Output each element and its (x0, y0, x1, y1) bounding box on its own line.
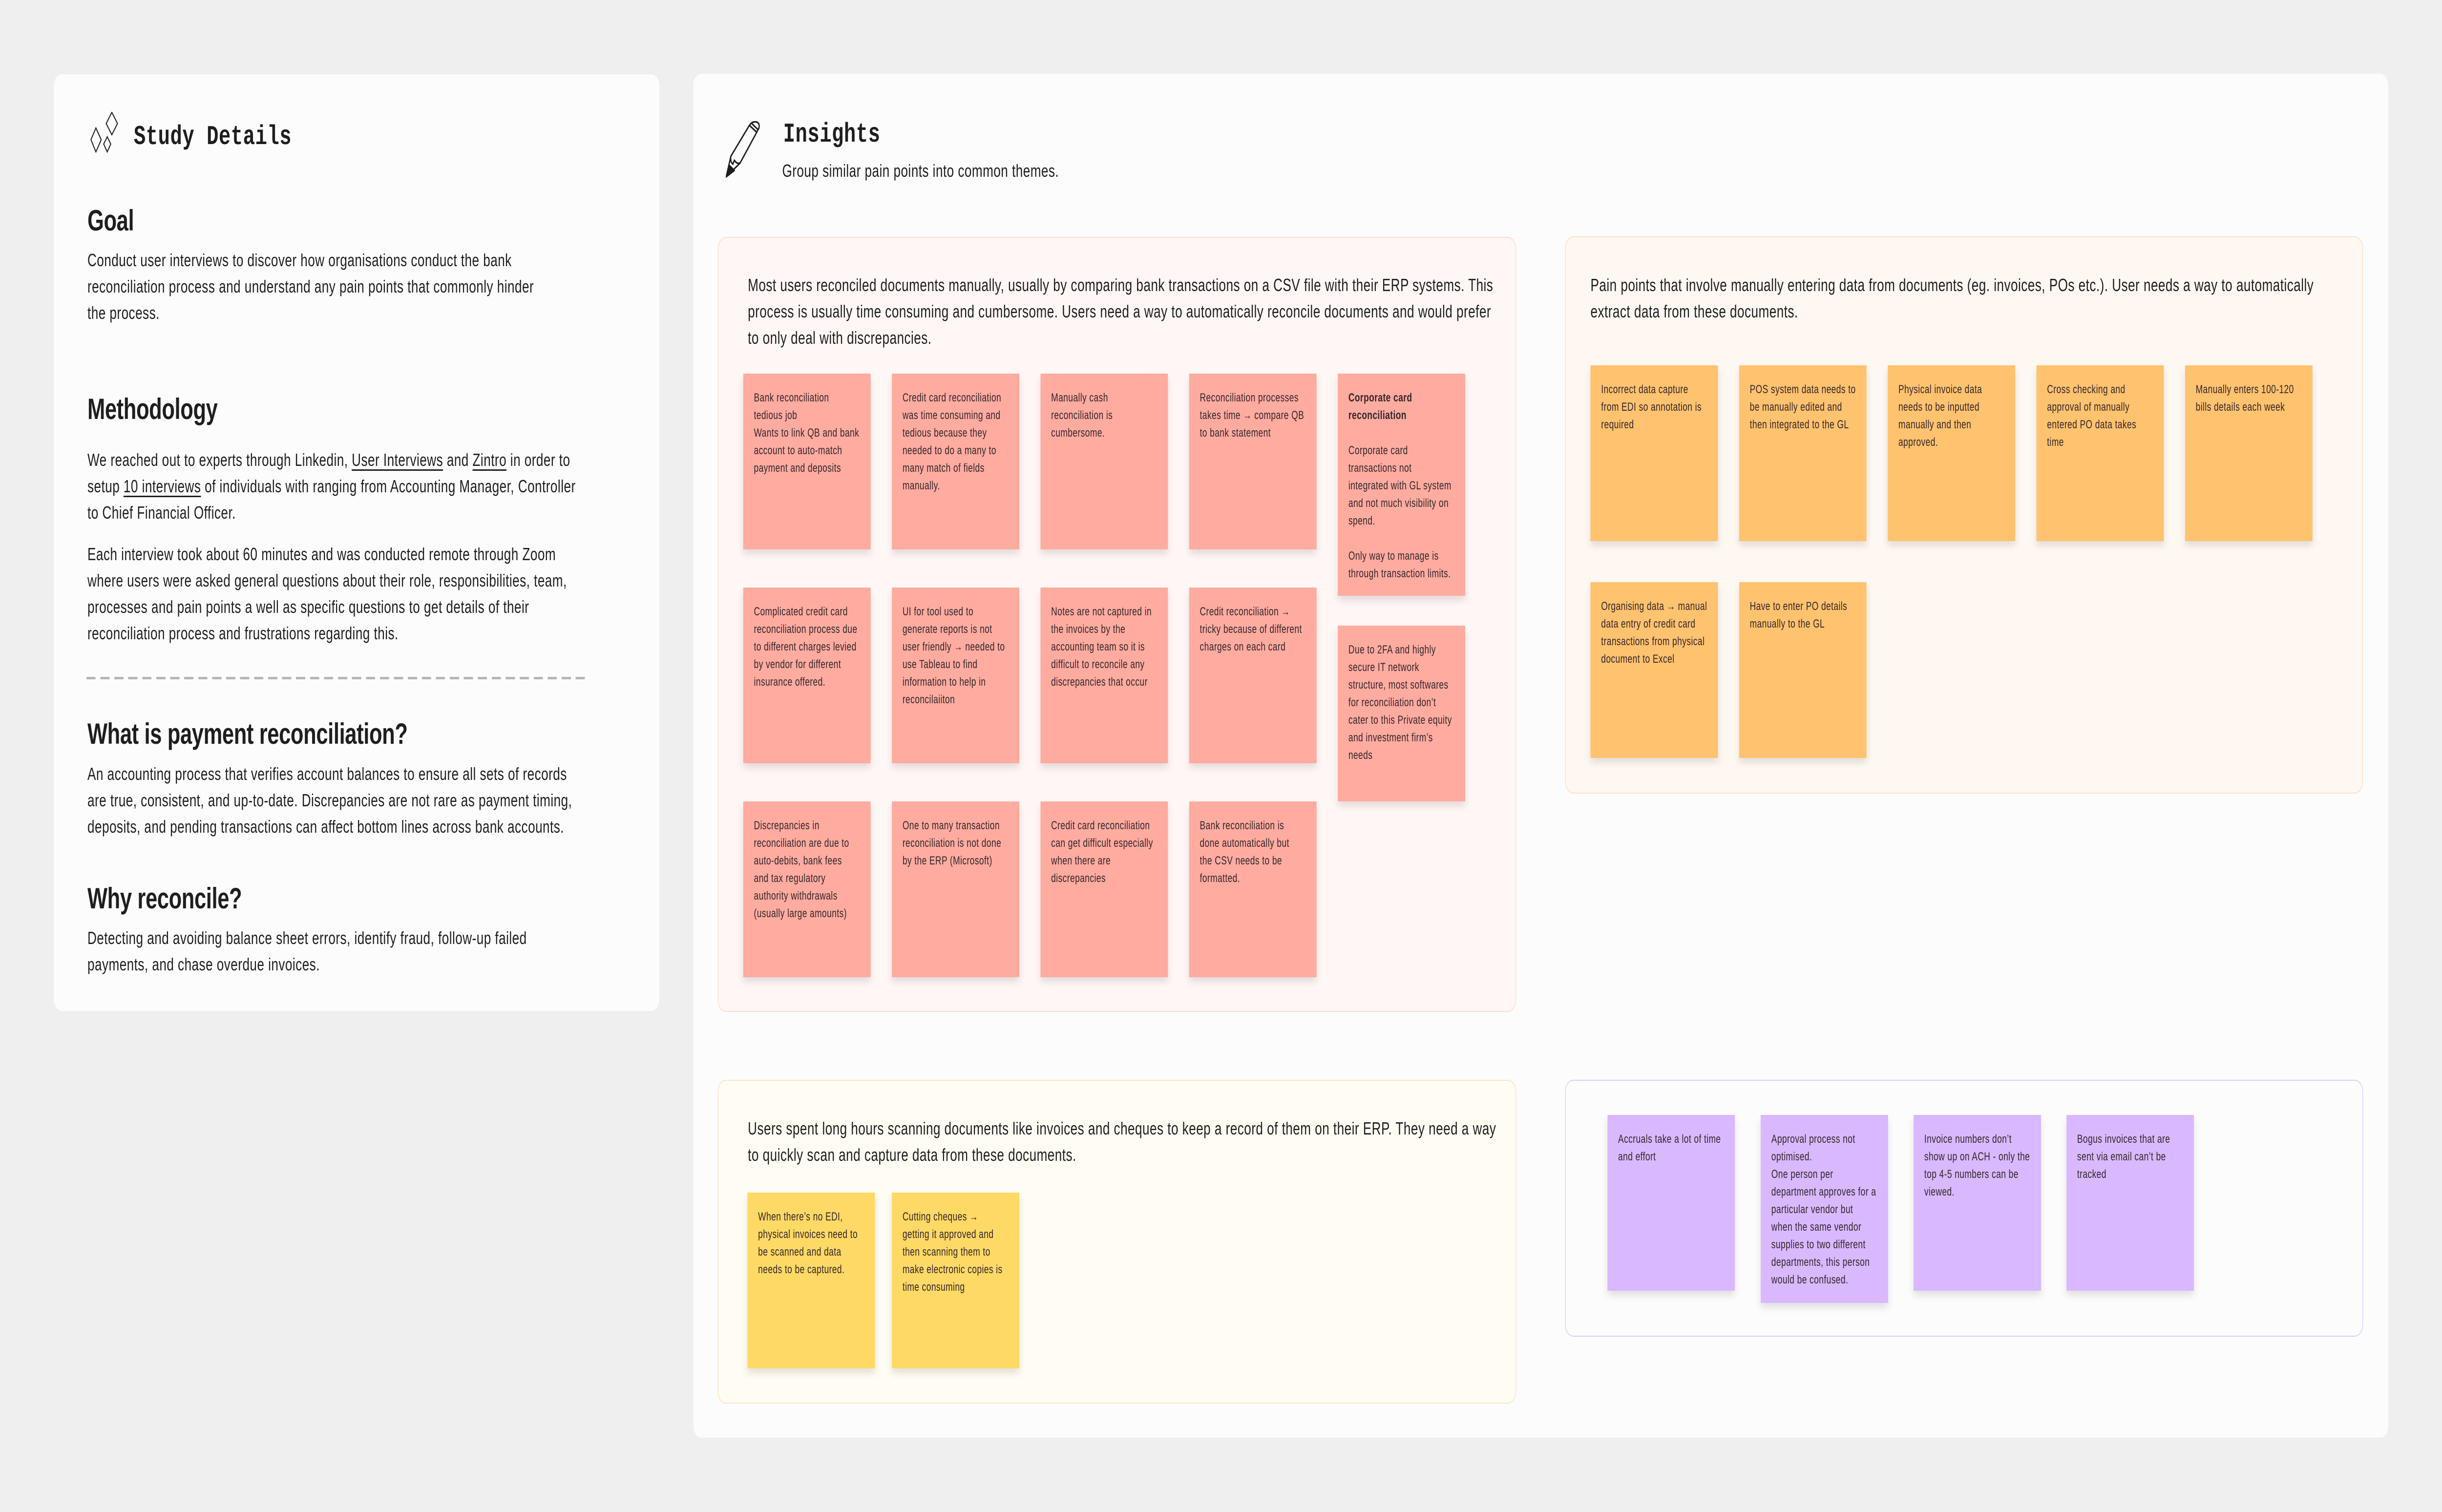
text: goal description: the process. (87, 303, 160, 323)
sticky note: discrepancies (1051, 872, 1106, 885)
panel: manual reconciliation theme (718, 237, 1516, 1012)
sticky note: information to help in (903, 675, 986, 689)
sticky note (2066, 1115, 2194, 1291)
sticky note: departments, this person (1771, 1256, 1870, 1269)
sticky note: required (1601, 418, 1634, 431)
text: manual data entry summary (1591, 274, 2314, 321)
text: manual reconciliation summary: to only deal with discrepancies. (748, 327, 932, 348)
sticky note: optimised. (1771, 1150, 1812, 1163)
text: manual data entry summary: extract data from these documents. (1591, 301, 1798, 321)
sticky note: Reconciliation processes (1200, 391, 1299, 404)
sticky note: reconciliation is (1051, 409, 1113, 422)
sticky note: corporate card: Only way to manage is (1348, 549, 1439, 563)
sticky note: Complicated credit card (754, 605, 848, 618)
text: payment reconciliation definition: are true, consistent, and up-to-date. Discrepancies are not rare as payment timing, (87, 790, 572, 810)
icon: pencil (726, 121, 760, 178)
sticky note: authority withdrawals (754, 889, 838, 903)
text: goal description: Conduct user interviews to discover how organisations conduct the bank (87, 250, 512, 270)
sticky note: corporate card: integrated with GL system (1348, 479, 1452, 492)
panel: other pain points (1565, 1080, 2363, 1337)
text: payment reconciliation definition: An accounting process that verifies account balances to ensure all sets of records (87, 764, 567, 783)
sticky note: department approves for a (1771, 1185, 1876, 1198)
sticky note: user friendly → needed to (903, 640, 1005, 653)
text: methodology recruiting: to Chief Financial Officer. (87, 502, 236, 523)
sticky note: charges on each card (1200, 640, 1285, 653)
heading: study details: Study Details (134, 121, 292, 152)
sticky note: Have to enter PO details (1750, 600, 1847, 613)
sticky note (743, 588, 871, 763)
text: methodology interviews: where users were asked general questions about their role, responsibilities, team, (87, 570, 567, 590)
sticky note: Credit card reconciliation (903, 391, 1001, 404)
sticky note: manually. (903, 479, 940, 492)
sticky note: UI for tool used to (903, 605, 973, 618)
sticky note: top 4-5 numbers can be (1924, 1168, 2019, 1181)
sticky note: When there’s no EDI, (758, 1210, 843, 1223)
panel: manual data entry theme (1565, 236, 2363, 794)
text: methodology interviews: processes and pain points a well as specific questions to get details of their (87, 597, 529, 616)
sticky note: make electronic copies is (903, 1263, 1003, 1276)
sticky note: cumbersome. (1051, 426, 1105, 440)
sticky note (1761, 1115, 1888, 1303)
sticky note: payment and deposits (754, 462, 841, 475)
sticky note: corporate card: Corporate card (1348, 391, 1412, 404)
sticky note: by the ERP (Microsoft) (903, 854, 992, 867)
sticky note (892, 588, 1019, 763)
text: document scanning summary: to quickly scan and capture data from these documents. (748, 1145, 1076, 1164)
sticky note: generate reports is not (903, 623, 992, 636)
sticky note (1040, 374, 1168, 549)
sticky note: corporate card: transactions not (1348, 462, 1411, 475)
sticky note (1739, 365, 1867, 541)
sticky note: account to auto-match (754, 444, 842, 457)
sticky note: corporate card: and not much visibility on (1348, 497, 1449, 510)
sticky note (1189, 374, 1317, 549)
sticky note: manually and then (1898, 418, 1971, 431)
sticky note: Approval process not (1771, 1133, 1855, 1146)
sticky note: Credit reconciliation → (1200, 605, 1290, 618)
heading: why reconcile: Why reconcile? (87, 882, 242, 915)
sticky note: tedious because they (903, 426, 987, 440)
sticky note: manually to the GL (1750, 617, 1825, 630)
sticky note: from EDI so annotation is (1601, 400, 1702, 414)
sticky note: Wants to link QB and bank (754, 426, 859, 440)
sticky note: accounting team so it is (1051, 640, 1145, 653)
sticky note: physical invoices need to (758, 1228, 858, 1241)
sticky note: the invoices by the (1051, 623, 1125, 636)
sticky note: One to many transaction (903, 819, 1000, 832)
sticky note: One person per (1771, 1168, 1833, 1181)
text: payment reconciliation definition: deposits, and pending transactions can affect bottom lines across bank accounts. (87, 817, 564, 836)
sticky note: be scanned and data (758, 1245, 842, 1259)
sticky note: (usually large amounts) (754, 907, 847, 920)
sticky note (1739, 582, 1867, 758)
sticky note: corporate card (1338, 374, 1465, 596)
sticky note: and tax regulatory (754, 872, 825, 885)
sticky note: viewed. (1924, 1185, 1955, 1198)
sticky note: approved. (1898, 436, 1938, 449)
sticky note: Incorrect data capture (1601, 383, 1688, 396)
sticky note: Discrepancies in (754, 819, 820, 832)
sticky note (1888, 365, 2015, 541)
sticky note: discrepancies that occur (1051, 675, 1148, 689)
sticky note: reconciliation are due to (754, 837, 849, 850)
sticky note: to bank statement (1200, 426, 1271, 440)
sticky note: the CSV needs to be (1200, 854, 1282, 867)
sticky note: Manually cash (1051, 391, 1108, 404)
text: manual reconciliation summary (748, 274, 1493, 348)
text: manual reconciliation summary: Most users reconciled documents manually, usually by comparing bank transactions on a CSV file with their ERP systems. This (748, 274, 1493, 295)
heading: methodology: Methodology (87, 393, 217, 425)
sticky note (743, 374, 871, 549)
sticky note: use Tableau to find (903, 658, 978, 671)
sticky note: formatted. (1200, 872, 1240, 885)
sticky note: then integrated to the GL (1750, 418, 1849, 431)
sticky note: for reconciliation don’t (1348, 696, 1436, 709)
sticky note: when there are (1051, 854, 1111, 867)
text: methodology interviews: reconciliation process and frustrations regarding this. (87, 623, 399, 643)
text: manual reconciliation summary: process is usually time consuming and cumbersome. Users need a way to automatically reconcile documents and would prefer (748, 301, 1491, 321)
sticky note: show up on ACH - only the (1924, 1150, 2030, 1163)
sticky note (1338, 626, 1465, 801)
sticky note: tedious job (754, 409, 797, 422)
sticky note: secure IT network (1348, 661, 1419, 674)
sticky note: Bank reconciliation (754, 391, 829, 404)
sticky note (2037, 365, 2164, 541)
sticky note: time consuming (903, 1281, 965, 1294)
sticky note (1189, 588, 1317, 763)
sticky note: Credit card reconciliation (1051, 819, 1150, 832)
sticky note: reconcilaiiton (903, 693, 955, 706)
sticky note: was time consuming and (903, 409, 1000, 422)
text: why reconcile description: payments, and chase overdue invoices. (87, 954, 320, 974)
sticky note: be manually edited and (1750, 400, 1842, 414)
sticky note: cater to this Private equity (1348, 714, 1452, 727)
sticky note: POS system data needs to (1750, 383, 1856, 396)
sticky note: can get difficult especially (1051, 837, 1153, 850)
sticky note: then scanning them to (903, 1245, 990, 1259)
sticky note: corporate card: reconciliation (1348, 409, 1407, 422)
sticky note: data entry of credit card (1601, 617, 1695, 630)
sticky note (1040, 588, 1168, 763)
sticky note (1591, 365, 1718, 541)
sticky note: to different charges levied (754, 640, 857, 653)
sticky note (892, 374, 1019, 549)
sticky note: Due to 2FA and highly (1348, 643, 1436, 656)
sticky note (1914, 1115, 2041, 1291)
sticky note: Accruals take a lot of time (1618, 1133, 1721, 1146)
text: document scanning summary (748, 1118, 1496, 1164)
sticky note (747, 1193, 875, 1368)
sticky note: insurance offered. (754, 675, 825, 689)
sticky note: approval of manually (2047, 400, 2129, 414)
sticky note: takes time → compare QB (1200, 409, 1304, 422)
sticky note: auto-debits, bank fees (754, 854, 842, 867)
text: methodology recruiting: We reached out to experts through Linkedin, User Interviews and Zintro in order to (87, 449, 570, 470)
text: payment reconciliation definition (87, 764, 572, 836)
sticky note (2185, 365, 2313, 541)
text: why reconcile description (87, 928, 527, 974)
text: methodology recruiting (87, 449, 576, 523)
sticky note (892, 801, 1019, 977)
sticky note (1591, 582, 1718, 758)
text: insights subtitle: Group similar pain points into common themes. (782, 160, 1059, 181)
sticky note (743, 801, 871, 977)
panel: insights (693, 73, 2389, 1438)
sticky note: done automatically but (1200, 837, 1289, 850)
heading: what is payment reconciliation: What is payment reconciliation? (87, 717, 408, 750)
sticky note: transactions from physical (1601, 635, 1705, 648)
sticky note: corporate card: spend. (1348, 514, 1375, 527)
text: goal description (87, 250, 534, 323)
sticky note: Invoice numbers don’t (1924, 1133, 2012, 1146)
sticky note: Manually enters 100-120 (2196, 383, 2294, 396)
sticky note: time (2047, 436, 2064, 449)
sticky note: reconciliation is not done (903, 837, 1001, 850)
text: manual data entry summary: Pain points that involve manually entering data from documents (eg. invoices, POs etc.). User needs a way to automatically (1591, 274, 2314, 295)
sticky note (1189, 801, 1317, 977)
sticky note: needed to do a many to (903, 444, 996, 457)
sticky note (1607, 1115, 1735, 1291)
sticky note: supplies to two different (1771, 1238, 1866, 1251)
heading: insights: Insights (783, 119, 881, 150)
sticky note: tracked (2077, 1168, 2106, 1181)
sticky note: when the same vendor (1771, 1220, 1861, 1234)
text: methodology recruiting: setup 10 interviews of individuals with ranging from Accounting Manager, Controller (87, 476, 576, 496)
sticky note: sent via email can’t be (2077, 1150, 2166, 1163)
sticky note (892, 1193, 1019, 1368)
sticky note: Physical invoice data (1898, 383, 1982, 396)
sticky note: and investment firm’s (1348, 731, 1433, 744)
text: goal description: reconciliation process and understand any pain points that commonly hinder (87, 276, 534, 296)
sticky note: needs to be inputted (1898, 400, 1979, 414)
icon: sparkles (91, 112, 118, 153)
sticky note: corporate card: Corporate card (1348, 444, 1408, 457)
sticky note: bills details each week (2196, 400, 2285, 414)
sticky note: many match of fields (903, 462, 985, 475)
sticky note: and effort (1618, 1150, 1656, 1163)
text: document scanning summary: Users spent long hours scanning documents like invoices and cheques to keep a record of them on their ERP. They need a way (748, 1118, 1496, 1138)
sticky note: Notes are not captured in (1051, 605, 1152, 618)
sticky note: tricky because of different (1200, 623, 1302, 636)
panel: study details (53, 74, 660, 1011)
sticky note (1040, 801, 1168, 977)
sticky note: by vendor for different (754, 658, 841, 671)
sticky note: needs (1348, 749, 1372, 762)
sticky note: Cutting cheques → (903, 1210, 978, 1223)
sticky note: reconciliation process due (754, 623, 857, 636)
sticky note: Cross checking and (2047, 383, 2126, 396)
text: why reconcile description: Detecting and avoiding balance sheet errors, identify fraud, follow-up failed (87, 928, 527, 947)
sticky note: would be confused. (1771, 1273, 1848, 1286)
sticky note: Bank reconciliation is (1200, 819, 1284, 832)
heading: goal: Goal (87, 204, 134, 237)
sticky note: Bogus invoices that are (2077, 1133, 2170, 1146)
sticky note: structure, most softwares (1348, 678, 1449, 692)
sticky note: entered PO data takes (2047, 418, 2136, 431)
sticky note: getting it approved and (903, 1228, 993, 1241)
panel: document scanning theme (718, 1080, 1516, 1404)
sticky note: needs to be captured. (758, 1263, 844, 1276)
sticky note: difficult to reconcile any (1051, 658, 1145, 671)
sticky note: corporate card: through transaction limits. (1348, 567, 1451, 580)
sticky note: particular vendor but (1771, 1203, 1853, 1216)
text: methodology interviews: Each interview took about 60 minutes and was conducted remote through Zoom (87, 544, 556, 564)
sticky note: Organising data → manual (1601, 600, 1707, 613)
sticky note: document to Excel (1601, 652, 1674, 666)
text: methodology interviews (87, 544, 567, 643)
